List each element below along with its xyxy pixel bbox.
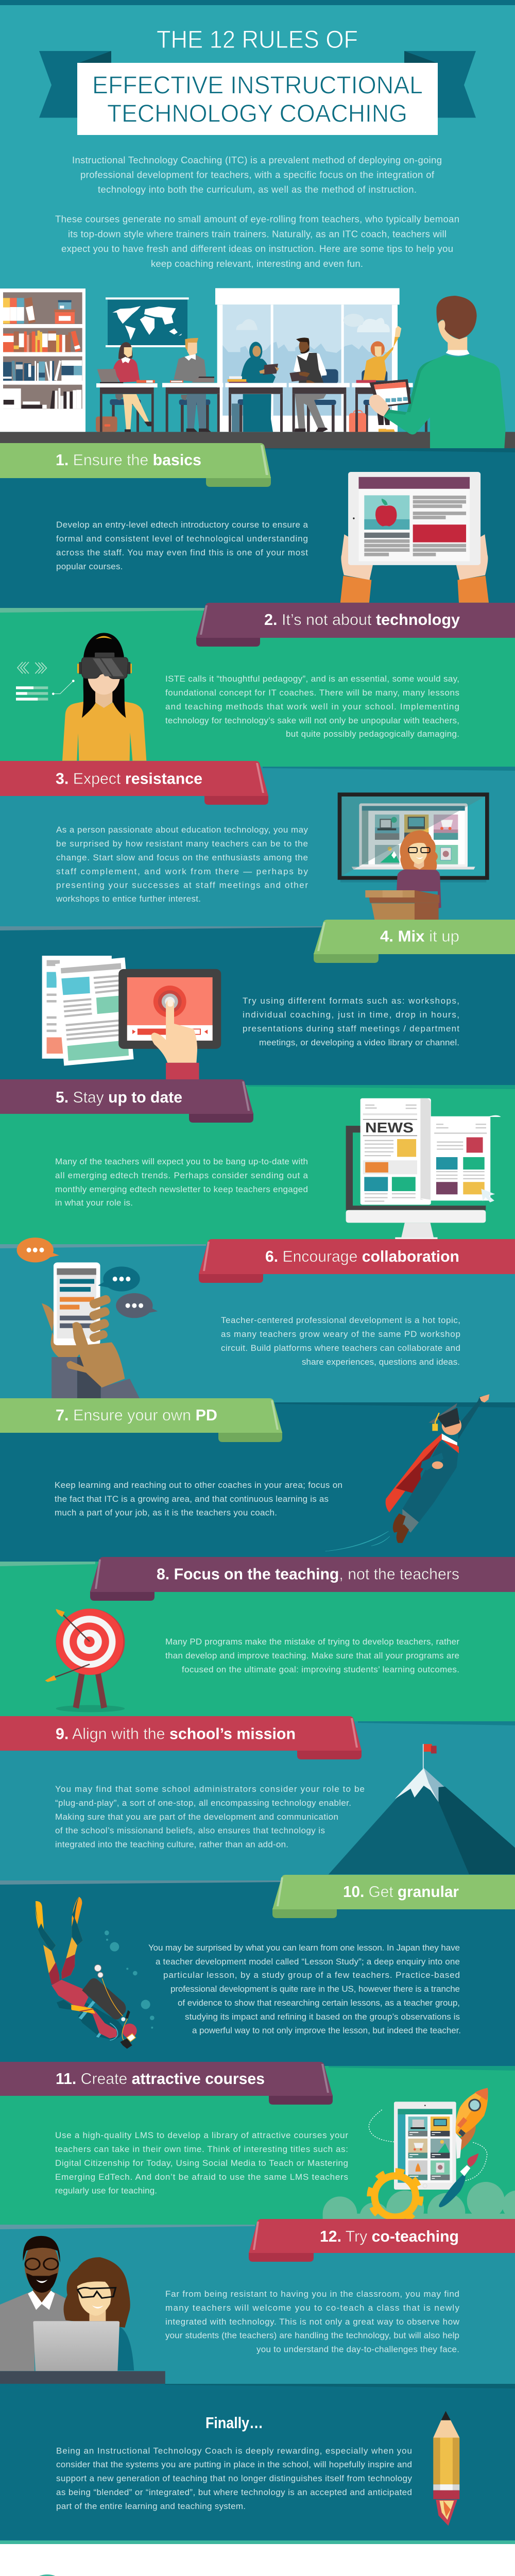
body text [55,1157,308,1208]
introduction text: its top-down style where trainers train trainers. Naturally, as an ITC coach, teachers will [68,228,447,239]
body text: as being “blended” or “integrated”, but where technology is an accepted and anticipated [56,2487,412,2497]
heading ribbon 7: 7. Ensure your own PD [56,1406,217,1424]
heading ribbon 5: 5. Stay up to date [56,1088,182,1106]
introduction text: expect you to have fresh and different ideas on instruction. Here are some tips to help you [61,243,453,254]
illustration: mountain with flag [329,1744,515,1874]
body text: Digital Citizenship for Today, Using Social Media to Teach or Mastering [55,2158,348,2168]
body text [221,1315,460,1367]
heading ribbon 3: 3. Expect resistance [56,770,202,788]
body text: As a person passionate about education technology, you may [56,825,308,835]
chairs [110,369,387,432]
body text [165,674,459,739]
student: man in waistcoat [289,337,328,432]
illustration: documents and video tablet [42,956,221,1079]
body text: “plug-and-play”, a sort of one-stop, all encompassing technology enabler. [55,1798,351,1808]
body text: foundational concept for IT coaches. There will be many, many lessons [165,688,459,698]
heading ribbon 2 [196,603,515,647]
panel: rule 8 [0,1557,515,1721]
heading ribbon 10 [272,1875,515,1918]
illustration: classroom [0,288,515,448]
illustration: course library tablet, rocket, gear and brush [323,2088,515,2232]
body text: the fact that ITC is a growing area, and that continuous learning is as [55,1494,329,1504]
student: man in grey [170,338,214,432]
body text [165,1637,459,1674]
panel: rule 2 [0,603,515,767]
heading ribbon 1 [0,443,271,487]
heading ribbon 12: 12. Try co-teaching [320,2227,459,2245]
body text: Keep learning and reaching out to other coaches in your area; focus on [55,1480,342,1490]
heading ribbon 9: 9. Align with the school’s mission [56,1725,296,1742]
body text [56,520,308,571]
body text [55,1480,342,1518]
body text: You may be surprised by what you can learn from one lesson. In Japan they have [148,1943,460,1953]
introduction text [55,155,459,269]
heading ribbon 11 [0,2062,333,2105]
introduction text: professional development for teachers, with a specific focus on the integration of [80,170,435,180]
body text [56,825,308,904]
body text [55,2130,348,2196]
illustration: tablet with hands [340,472,489,603]
body text: regularly use for teaching. [55,2186,157,2196]
body text: presentations during staff meetings / department [243,1024,459,1033]
body text: of the school’s missionand beliefs, also ensures that technology is [55,1826,325,1835]
title banner [39,51,476,135]
panel: rule 6 [0,1238,515,1402]
heading ribbon 12 [249,2219,515,2262]
heading ribbon 4 [314,920,515,963]
heading ribbon 5 [0,1079,253,1123]
body text: monthly emerging edtech newsletter to keep teachers engaged [55,1184,308,1194]
body text: Teacher-centered professional development is a hot topic, [221,1315,460,1325]
body text: popular courses. [56,562,123,571]
body text: focused on the ultimate goal: improving students’ learning outcomes. [182,1665,459,1674]
body text [243,996,459,1047]
body text [148,1943,461,2035]
window with skyline [215,288,400,432]
body text: teachers can take in their own time. Think of interesting titles such as: [55,2144,348,2154]
body text: Many PD programs make the mistake of trying to develop teachers, rather [165,1637,459,1647]
body text: individual coaching, just in time, drop in hours, [243,1010,459,1020]
body text: be surprised by how resistant many teachers can be to the [56,839,308,849]
floor [0,432,515,448]
body text [55,1784,365,1850]
body text: meetings, or developing a video library or channel. [259,1038,459,1047]
illustration: woman wearing VR headset [62,633,146,761]
panel: rule 11 [0,2062,515,2232]
heading ribbon 6: 6. Encourage collaboration [265,1247,459,1265]
body text: than develop and improve teaching. Make sure that all your programs are [165,1651,459,1660]
heading ribbon 3 [0,761,268,805]
panel: rule 4 [0,920,515,1085]
body text: Try using different formats such as: workshops, [243,996,459,1006]
panel: rule 5 [0,1079,515,1244]
illustration: two teachers at a laptop [0,2236,165,2384]
heading ribbon 9 [0,1716,362,1759]
body text: you to understand the day-to-challenges they face. [256,2344,459,2354]
body text: staff complement, and work from there — perhaps by [56,867,308,876]
body text: support a new generation of teaching that no longer distinguishes itself from technology [56,2473,412,2483]
body text: ISTE calls it “thoughtful pedagogy”, and is an essential, some would say, [165,674,459,684]
body text: your students (the teachers) are handling the technology, but will also help [165,2331,459,2340]
body text: change. Start slow and focus on the enthusiasts among the [56,853,308,862]
illustration: rocket pencil [433,2411,459,2526]
illustration: flying graduate [325,1394,489,1551]
body text: but quite possibly pedagogically damaging. [286,729,459,739]
body text: professional development is quite rare in the US, however there is a tranche [170,1984,460,1994]
body text: a teacher development model called “Lesson Study”; a deep enquiry into one [156,1957,460,1967]
illustration: target with arrows [45,1608,125,1712]
body text: Use a high-quality LMS to develop a library of attractive courses your [55,2130,348,2140]
body text: workshops to entice further interest. [56,894,201,904]
panel: finally [0,2384,515,2544]
body text: studying its impact and refining it based on the group’s observations is [185,2012,460,2022]
body text: across the staff. You may even find this is one of your most [56,548,308,557]
heading ribbon 8: 8. Focus on the teaching, not the teachers [157,1565,459,1583]
body text: formal and consistent level of technological understanding [56,534,308,544]
panel: rule 12 [0,2219,515,2384]
bookshelf [0,289,85,432]
body text [165,2289,460,2354]
heading ribbon 7 [0,1398,282,1442]
student: woman in red [96,342,155,432]
heading ribbon 8 [90,1557,515,1601]
body text: a powerful way to not only improve the lesson, but indeed the teacher. [192,2026,461,2035]
panel: rule 3 [0,761,515,926]
body text: Develop an entry-level edtech introductory course to ensure a [56,520,308,530]
illustration: newspapers on monitor [346,1098,501,1240]
title banner: TECHNOLOGY COACHING [107,100,407,128]
heading: finally: Finally… [205,2414,263,2432]
illustration: presenter at podium with screen [338,792,489,920]
body text: Being an Instructional Technology Coach is deeply rewarding, especially when you [56,2446,412,2455]
body text: part of the entire learning and teaching system. [56,2501,246,2511]
panel: rule 9 [0,1716,515,1880]
teacher with tablet [369,296,506,448]
illustration: phone and chat bubbles [17,1238,158,1398]
body text: Many of the teachers will expect you to be bang up-to-date with [55,1157,308,1166]
body text: integrated into the teaching culture, rather than an add-on. [55,1839,288,1850]
body text: circuit. Build platforms where teachers can collaborate and [221,1343,460,1353]
body text: particular lesson, by a study group of a few teachers. Practice-based [163,1970,460,1980]
panel: footer [0,2544,515,2576]
body text: share experiences, questions and ideas. [302,1357,460,1367]
body text: Emerging EdTech. And don’t be afraid to use the same LMS teachers [55,2172,348,2182]
body text: Making sure that you are part of the development and communication [55,1812,338,1822]
body text: as many teachers grow weary of the same PD workshop [221,1329,460,1339]
body text: in what your role is. [55,1198,133,1208]
panel: rule 10 [0,1875,515,2066]
heading ribbon 1: 1. Ensure the basics [56,451,201,469]
body text: of evidence to show that researching certain lessons, as a teacher group, [178,1998,460,2008]
illustration: scuba diver [36,1897,154,2049]
panel: rule 1 [0,443,515,608]
desks [96,383,427,432]
introduction text: These courses generate no small amount of eye-rolling from teachers, who typically bemoan [55,214,459,225]
body text [56,2446,412,2511]
body text: and teaching methods that work well in your school. Implementing [165,702,459,711]
student: woman raising hand [349,326,401,433]
heading ribbon 11: 11. Create attractive courses [56,2070,265,2088]
introduction text: keep coaching relevant, interesting and even fun. [151,258,363,269]
illustration: newspapers on monitor: NEWS [365,1120,414,1136]
world map [106,297,189,347]
title banner: EFFECTIVE INSTRUCTIONAL [92,72,423,99]
introduction text: technology into both the curriculum, as well as the method of instruction. [98,184,417,195]
panel: header and introduction [0,0,515,448]
body text: many teachers will welcome you to co-teach a class that is newly [165,2303,459,2313]
body text: all emerging edtech trends. Perhaps consider sending out a [55,1171,308,1180]
panel: rule 7 [0,1394,515,1562]
icons: VR interface chevrons and bars [16,662,75,701]
student: woman in hijab [228,342,279,432]
heading ribbon 6 [199,1239,515,1283]
heading ribbon 4: 4. Mix it up [380,927,459,945]
heading ribbon 2: 2. It’s not about technology [264,611,460,629]
body text: consider that the systems you are putting in place in the school, will hopefully inspire and [56,2460,412,2469]
body text: much a part of your job, as it is the teachers you coach. [55,1507,277,1518]
title: the 12 rules of: THE 12 RULES OF [157,26,358,54]
body text: You may find that some school administrators consider your role to be [55,1784,365,1794]
body text: integrated with technology. This is not only a great way to observe how [165,2317,460,2327]
body text: Far from being resistant to having you in the classroom, you may find [165,2289,459,2299]
introduction text: Instructional Technology Coaching (ITC) is a prevalent method of deploying on-going [72,155,442,165]
body text: presenting your successes at staff meetings and other [56,880,308,890]
body text: technology for technology’s sake will not only be unpopular with teachers, [165,716,459,725]
heading ribbon 10: 10. Get granular [343,1883,459,1901]
